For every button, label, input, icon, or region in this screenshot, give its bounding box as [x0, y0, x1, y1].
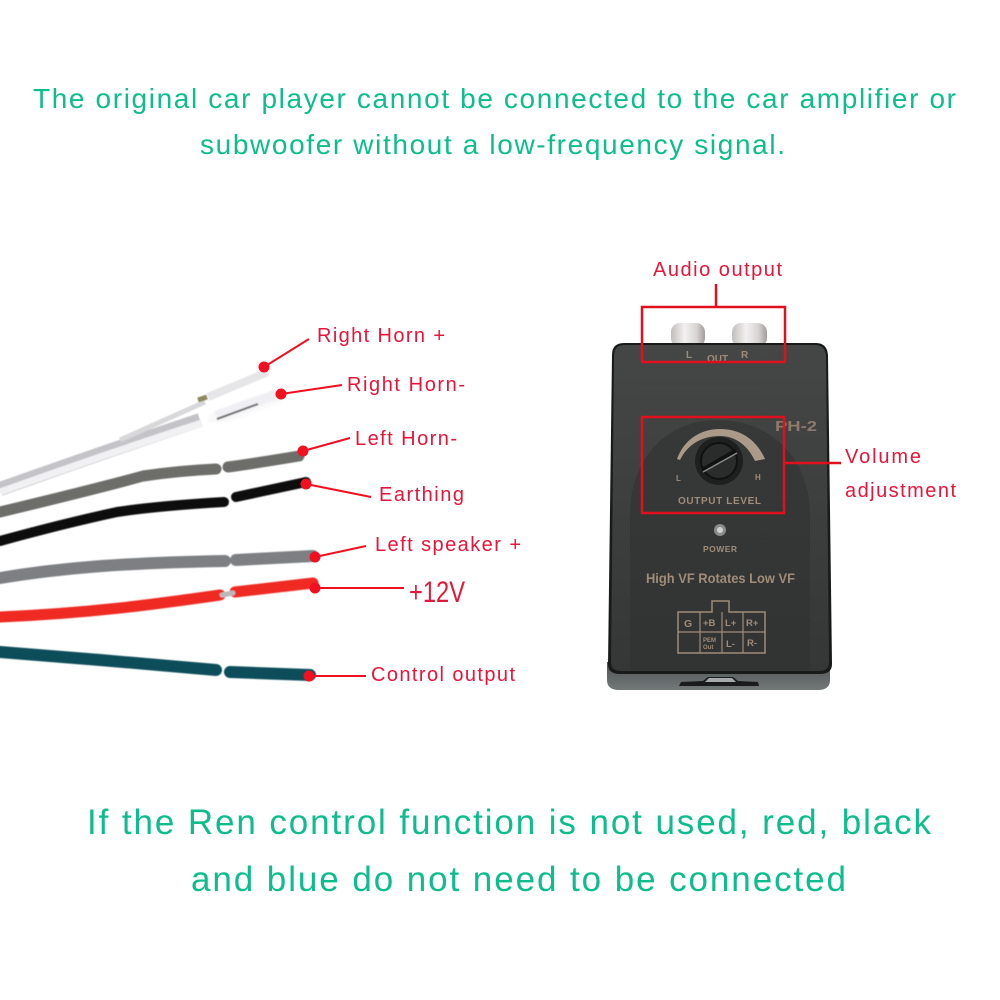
wire labels: Right Horn +	[317, 325, 445, 347]
wires photo	[0, 372, 313, 675]
model number: PH-2	[775, 418, 817, 435]
callout: left speaker plus	[310, 546, 366, 562]
connector pin diagram: PEM	[703, 638, 716, 644]
wire labels: Right Horn-	[347, 374, 465, 396]
dome panel	[630, 420, 810, 670]
callout: plus 12V	[310, 584, 404, 592]
connector pin diagram: G	[684, 618, 692, 630]
connector pin diagram: L+	[725, 618, 737, 629]
highlight: volume adjustment	[642, 417, 841, 513]
wire labels: Control output	[371, 664, 515, 686]
connector pin diagram	[678, 601, 765, 653]
RCA jacks	[671, 323, 767, 347]
wire labels: Left Horn-	[355, 428, 457, 450]
label: plus 12V: +12V	[409, 576, 465, 609]
wire callouts	[260, 339, 404, 680]
wire labels: Earthing	[379, 484, 464, 506]
wire labels: Left speaker +	[375, 534, 521, 556]
wire: black, earthing	[0, 482, 306, 541]
callout: left horn minus	[298, 438, 350, 456]
connector pin diagram: R+	[746, 618, 759, 629]
connector pin diagram: L-	[726, 639, 735, 650]
volume dial: L	[676, 474, 681, 483]
device	[607, 284, 841, 690]
top heading: subwoofer without a low-frequency signal.	[200, 129, 785, 160]
label: volume adjustment: Volume	[845, 446, 921, 468]
bottom note: and blue do not need to be connected	[191, 860, 846, 899]
label: volume adjustment	[845, 446, 956, 502]
bottom note	[87, 803, 932, 899]
product name: High VF Rotates Low VF	[646, 570, 795, 586]
label: audio output: Audio output	[653, 259, 782, 281]
wire: teal, control output	[0, 652, 310, 675]
output labels: L	[686, 350, 692, 361]
volume dial: H	[755, 473, 761, 482]
wire: gray, left speaker plus	[0, 556, 313, 578]
wire labels	[317, 325, 521, 686]
top heading	[33, 83, 956, 160]
connector pin diagram: +B	[703, 618, 716, 629]
label: volume adjustment: adjustment	[845, 480, 956, 502]
connector pin diagram: Out	[703, 645, 713, 651]
output labels: OUT	[707, 354, 728, 365]
wire: red, plus 12V	[0, 583, 313, 617]
bottom note: If the Ren control function is not used, red, black	[87, 803, 932, 842]
wire: white pair	[0, 372, 277, 492]
highlight: audio output	[642, 284, 785, 362]
wire: gray, left horn minus	[0, 456, 299, 512]
device shell	[607, 343, 832, 690]
callout: control output	[304, 672, 366, 680]
volume dial: OUTPUT LEVEL	[678, 496, 761, 507]
output labels	[686, 350, 749, 365]
callout: earthing	[302, 480, 371, 497]
output labels: R	[741, 350, 749, 361]
callout: right horn minus	[276, 385, 342, 398]
volume dial	[676, 429, 765, 507]
power LED	[703, 524, 737, 554]
callout: right horn plus	[260, 339, 309, 372]
connector pin diagram: R-	[747, 638, 757, 649]
top heading: The original car player cannot be connected to the car amplifier or	[33, 83, 956, 114]
power LED: POWER	[703, 544, 737, 554]
